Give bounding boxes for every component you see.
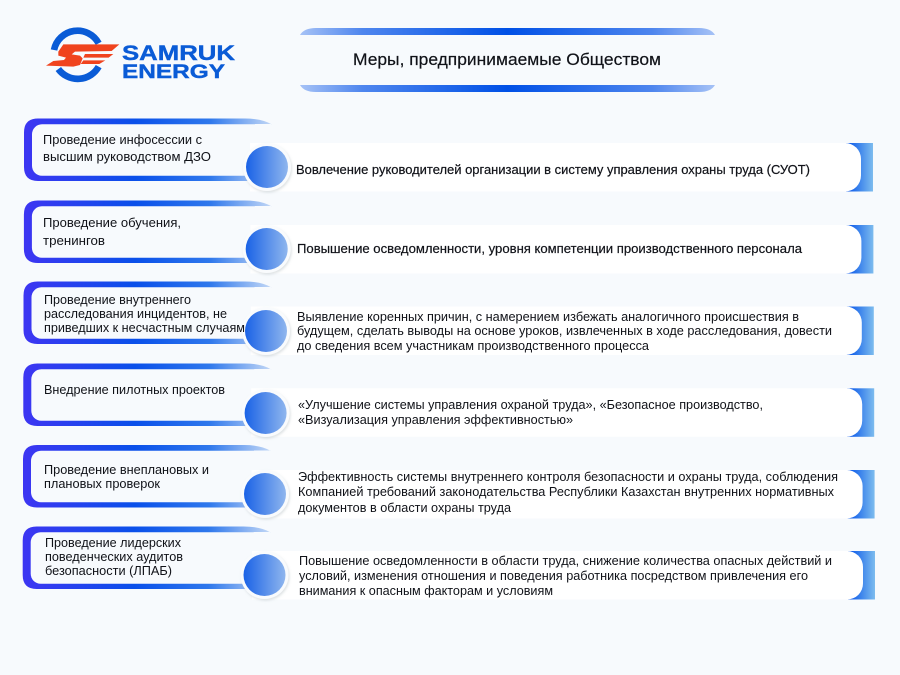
right text: Вовлечение руководителей организации в систему управления охраны труда (СУОТ) — [296, 162, 810, 177]
right text — [298, 469, 838, 515]
left text: тренингов — [43, 233, 105, 248]
circle marker — [243, 225, 291, 273]
title: Меры, предпринимаемые Обществом — [353, 50, 661, 69]
left text: Проведение внутреннего — [44, 292, 191, 307]
left text — [44, 462, 209, 491]
row 4 — [23, 364, 874, 437]
right text: Повышение осведомленности в области труда, снижение количества опасных действий и — [299, 553, 832, 568]
logo emblem — [46, 31, 119, 79]
left panel frame — [24, 200, 282, 263]
logo wordmark — [122, 42, 235, 83]
circle marker — [243, 143, 291, 191]
right text: Эффективность системы внутреннего контроля безопасности и охраны труда, соблюдения — [298, 469, 838, 484]
left text: расследования инцидентов, не — [44, 306, 227, 321]
right text: документов в области охраны труда — [298, 500, 512, 515]
left text: поведенческих аудитов — [45, 549, 183, 564]
left panel frame — [23, 364, 281, 426]
right text: внимания к опасным факторам и условиям — [299, 583, 553, 598]
right white panel with blue end band — [252, 470, 875, 518]
title top bar — [300, 28, 715, 35]
left panel frame — [24, 282, 282, 344]
circle marker — [242, 389, 290, 437]
right text — [297, 309, 832, 353]
right text: Выявление коренных причин, с намерением избежать аналогичного происшествия в — [297, 309, 799, 324]
title block — [300, 28, 715, 92]
left text: Проведение лидерских — [45, 535, 182, 550]
title bottom bar — [300, 85, 715, 92]
right text: до сведения всем участникам производственного процесса — [297, 338, 650, 353]
left text: Проведение инфосессии с — [43, 132, 203, 147]
left panel frame — [23, 445, 281, 508]
left text: Проведение внеплановых и — [44, 462, 209, 477]
left panel frame — [23, 526, 281, 589]
left text: высшим руководством ДЗО — [43, 149, 211, 164]
left text: Внедрение пилотных проектов — [44, 382, 225, 397]
right text: будущем, сделать выводы на основе уроков, извлеченных в ходе расследования, довести — [297, 323, 832, 338]
logo: Samruk Energy — [46, 31, 235, 83]
left text — [45, 535, 183, 578]
left text: безопасности (ЛПАБ) — [45, 563, 172, 578]
right text: Компанией требований законодательства Республики Казахстан внутренних нормативных — [298, 484, 835, 499]
row 3 — [24, 282, 874, 355]
logo wordmark: ENERGY — [122, 61, 225, 83]
left text: приведших к несчастным случаям — [44, 320, 245, 335]
right white panel with blue end band — [251, 388, 874, 437]
circle marker — [241, 470, 289, 518]
right white panel with blue end band — [250, 225, 873, 274]
left text — [43, 215, 181, 248]
right text: «Улучшение системы управления охраной труда», «Безопасное производство, — [298, 397, 763, 412]
left text — [44, 292, 245, 335]
left text: плановых проверок — [44, 476, 160, 491]
left text: Проведение обучения, — [43, 215, 181, 230]
row 2 — [24, 200, 873, 274]
right text: условий, изменения отношения и поведения работника посредством привлечения его — [299, 568, 808, 583]
right text: Повышение осведомленности, уровня компетенции производственного персонала — [297, 241, 803, 256]
row 1 — [24, 118, 873, 192]
right text — [298, 397, 763, 427]
right text — [299, 553, 832, 598]
row 6 — [23, 526, 875, 600]
logo wordmark: SAMRUK — [122, 42, 235, 65]
right white panel with blue end band — [251, 306, 874, 355]
left text — [43, 132, 211, 164]
right white panel with blue end band — [250, 143, 873, 192]
left panel frame — [24, 118, 282, 181]
circle marker — [242, 307, 290, 355]
row 5 — [23, 445, 875, 518]
right white panel with blue end band — [252, 551, 875, 600]
right text: «Визуализация управления эффективностью» — [298, 412, 573, 427]
circle marker — [240, 551, 288, 599]
